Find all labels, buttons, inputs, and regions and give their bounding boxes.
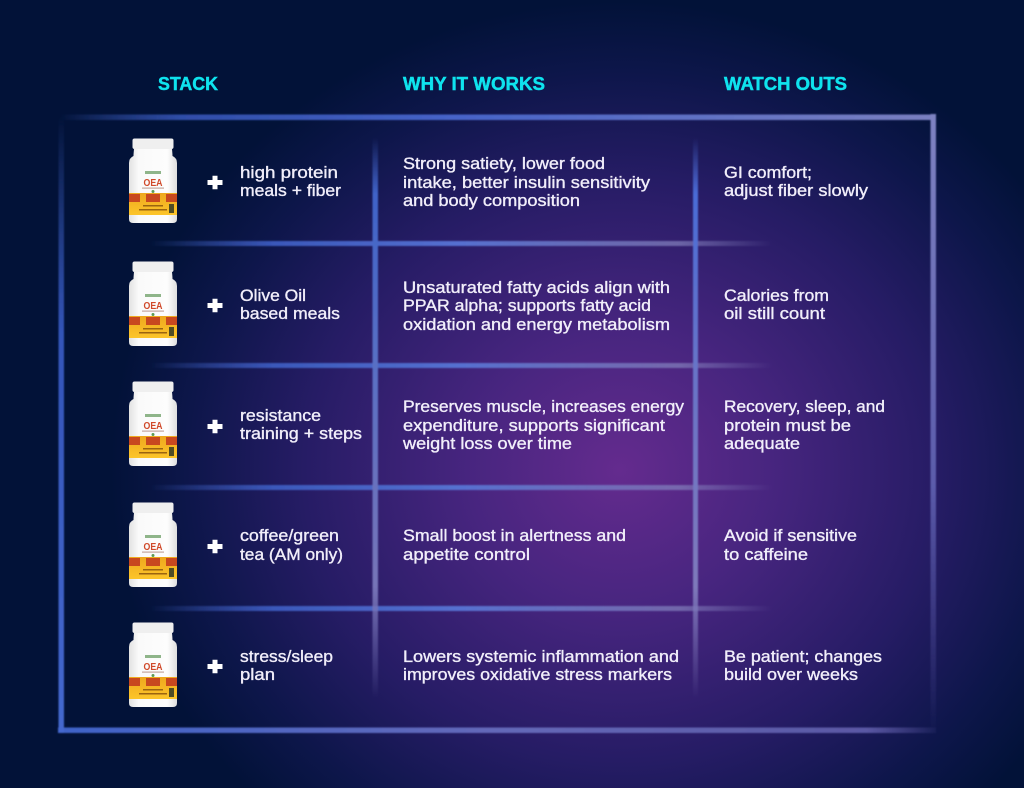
icon: OEA bottle (129, 622, 177, 707)
stack text: resistance (240, 407, 321, 425)
why it works text: oxidation and energy metabolism (403, 316, 670, 334)
icon: OEA bottle (129, 502, 177, 587)
why it works text: Preserves muscle, increases energy (403, 398, 685, 416)
watch outs text: protein must be (724, 417, 851, 435)
row 2 (129, 262, 829, 346)
icon: OEA bottle: OEA (144, 421, 162, 432)
why it works text: expenditure, supports significant (403, 417, 665, 435)
stack text: Olive Oil (240, 287, 306, 305)
why it works text: Lowers systemic inflammation and (403, 648, 679, 666)
stack text: tea (AM only) (240, 546, 343, 564)
icon: OEA bottle: OEA (144, 542, 162, 553)
icon: plus (208, 176, 222, 189)
row 5 (129, 622, 882, 707)
stack text: high protein (240, 164, 338, 182)
icon: OEA bottle (129, 382, 177, 466)
watch outs text: to caffeine (724, 546, 808, 564)
stack text: based meals (240, 305, 340, 323)
why it works text: PPAR alpha; supports fatty acid (403, 297, 651, 315)
table grid (58, 114, 936, 733)
stack text: training + steps (240, 425, 362, 443)
why it works text: intake, better insulin sensitivity (403, 174, 651, 192)
stack text: stress/sleep (240, 648, 333, 666)
watch outs text: adequate (724, 435, 800, 453)
stack text: plan (240, 666, 275, 684)
watch outs text: GI comfort; (724, 164, 812, 182)
why it works text: appetite control (403, 546, 530, 564)
icon: OEA bottle: OEA (144, 301, 162, 312)
why it works text: weight loss over time (402, 435, 572, 453)
row 1 (129, 138, 869, 223)
why it works text: and body composition (403, 192, 580, 210)
watch outs text: build over weeks (724, 666, 858, 684)
watch outs text: Recovery, sleep, and (724, 398, 885, 416)
why it works text: Unsaturated fatty acids align with (403, 279, 670, 297)
why it works text: Strong satiety, lower food (403, 155, 605, 173)
icon: OEA bottle (129, 138, 177, 223)
icon: plus (208, 660, 222, 673)
icon: OEA bottle (129, 262, 177, 346)
why it works text: Small boost in alertness and (403, 527, 626, 545)
watch outs text: oil still count (724, 305, 825, 323)
watch outs text: Be patient; changes (724, 648, 882, 666)
watch outs text: Avoid if sensitive (724, 527, 857, 545)
icon: plus (208, 299, 222, 312)
icon: OEA bottle: OEA (144, 178, 162, 189)
watch outs text: Calories from (724, 287, 829, 305)
heading: stack: STACK (158, 73, 219, 94)
heading: why it works: WHY IT WORKS (403, 73, 545, 94)
icon: plus (208, 420, 222, 433)
row 3 (129, 382, 885, 466)
icon: plus (208, 540, 222, 553)
watch outs text: adjust fiber slowly (724, 182, 869, 200)
stack text: meals + fiber (240, 182, 342, 200)
why it works text: improves oxidative stress markers (403, 666, 672, 684)
icon: OEA bottle: OEA (144, 662, 162, 673)
heading: watch outs: WATCH OUTS (724, 73, 847, 94)
stack text: coffee/green (240, 527, 339, 545)
row 4 (129, 502, 857, 587)
